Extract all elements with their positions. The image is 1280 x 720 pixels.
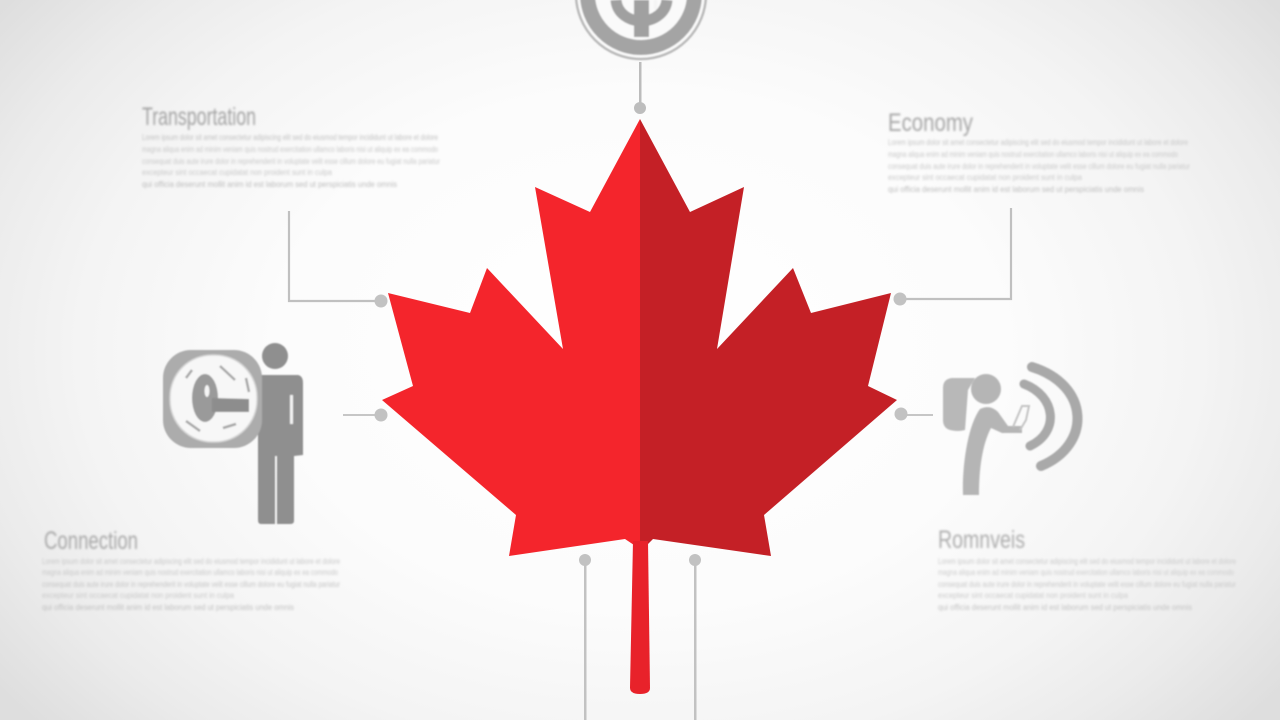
text block: upper right: qui officia deserunt mollit anim id est laborum sed ut perspiciatis unde omnis	[888, 185, 1144, 194]
text block: upper left: Lorem ipsum dolor sit amet consectetur adipiscing elit sed do eiusmod tempor incididunt ut labore et dolore	[142, 133, 438, 142]
text block: lower right	[938, 526, 1236, 612]
text block: upper left: qui officia deserunt mollit anim id est laborum sed ut perspiciatis unde omnis	[142, 180, 397, 189]
icon: person with gauge	[163, 343, 303, 524]
leaf right half	[640, 119, 897, 556]
heading: upper right: Economy	[888, 109, 973, 137]
text block: upper left	[142, 103, 440, 189]
connector: upper right	[894, 208, 1011, 306]
text block: upper right: consequat duis aute irure dolor in reprehenderit in voluptate velit esse cillum dolore eu fugiat nulla pariatur	[888, 162, 1190, 171]
text block: upper right: excepteur sint occaecat cupidatat non proident sunt in culpa	[888, 173, 1082, 182]
leaf stem	[630, 541, 650, 694]
connector: middle right	[894, 408, 933, 420]
text block: lower left: excepteur sint occaecat cupidatat non proident sunt in culpa	[42, 591, 234, 600]
text block: lower left: consequat duis aute irure dolor in reprehenderit in voluptate velit esse cillum dolore eu fugiat nulla pariatur	[42, 580, 340, 589]
text block: upper left: consequat duis aute irure dolor in reprehenderit in voluptate velit esse cillum dolore eu fugiat nulla pariatur	[142, 157, 440, 166]
text block: lower left	[42, 527, 340, 612]
connector: bottom right	[689, 554, 701, 720]
text block: upper left: excepteur sint occaecat cupidatat non proident sunt in culpa	[142, 168, 332, 177]
text block: lower right: qui officia deserunt mollit anim id est laborum sed ut perspiciatis unde omnis	[938, 603, 1192, 612]
icon: dollar coin, top	[576, 0, 706, 59]
text block: lower left: Lorem ipsum dolor sit amet consectetur adipiscing elit sed do eiusmod tempor incididunt ut labore et dolore	[42, 557, 340, 566]
text block: upper right	[888, 109, 1190, 194]
icon: person with laptop and signal waves	[943, 367, 1077, 495]
text block: lower right: excepteur sint occaecat cupidatat non proident sunt in culpa	[938, 591, 1128, 600]
connector: upper left	[289, 211, 388, 308]
text block: upper right: Lorem ipsum dolor sit amet consectetur adipiscing elit sed do eiusmod tempor incididunt ut labore et dolore	[888, 138, 1188, 147]
maple leaf	[382, 119, 897, 694]
heading: upper left: Transportation	[142, 103, 256, 131]
leaf left half	[382, 119, 640, 556]
connector: bottom left	[579, 554, 591, 720]
heading: lower right: Romnveis	[938, 526, 1025, 554]
text block: lower left: magna aliqua enim ad minim veniam quis nostrud exercitation ullamco laboris nisi ut aliquip ex ea commodo	[42, 568, 338, 577]
heading: lower left: Connection	[44, 527, 138, 555]
connector: top	[634, 62, 646, 114]
text block: upper left: magna aliqua enim ad minim veniam quis nostrud exercitation ullamco laboris nisi ut aliquip ex ea commodo	[142, 145, 438, 154]
connector: middle left	[343, 408, 388, 422]
text block: upper right: magna aliqua enim ad minim veniam quis nostrud exercitation ullamco laboris nisi ut aliquip ex ea commodo	[888, 150, 1178, 159]
text block: lower left: qui officia deserunt mollit anim id est laborum sed ut perspiciatis unde omnis	[42, 603, 294, 612]
